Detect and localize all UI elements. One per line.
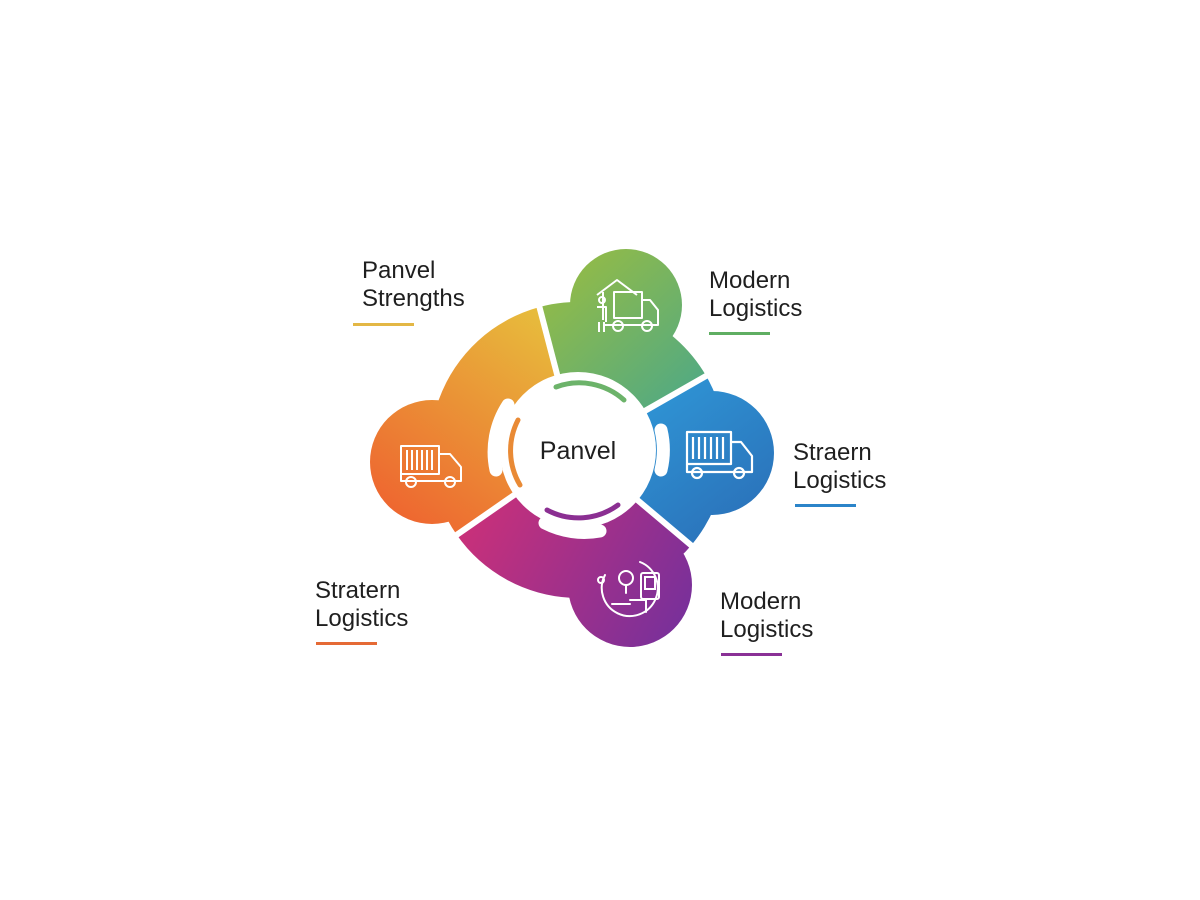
label: Modern Logistics (bottom) [720, 588, 813, 643]
segment: orange [370, 307, 559, 535]
icon: blue truck [687, 432, 752, 478]
label: Modern Logistics (top): Modern [709, 267, 790, 294]
segment: green [540, 249, 706, 412]
label: Panvel Strengths: Panvel [362, 257, 435, 284]
label: Modern Logistics (bottom): Modern [720, 588, 801, 615]
center circle [515, 387, 641, 513]
icon: purple cycle [598, 562, 659, 616]
icon: warehouse truck [597, 280, 658, 332]
inner arcs [511, 383, 624, 518]
label: Stratern Logistics: Stratern [315, 577, 400, 604]
label: Stratern Logistics: Logistics [315, 605, 408, 632]
underline: orange [316, 642, 377, 645]
label: Stratern Logistics [315, 577, 408, 632]
capsule cutouts [494, 405, 663, 532]
label: Modern Logistics (top) [709, 267, 802, 322]
icon: orange truck [401, 446, 461, 487]
label: Panvel Strengths [362, 257, 465, 312]
underline: purple [721, 653, 782, 656]
underline: blue [795, 504, 856, 507]
label: Modern Logistics (top): Logistics [709, 295, 802, 322]
label: Panvel Strengths: Strengths [362, 285, 465, 312]
label: Straern Logistics [793, 439, 886, 494]
label: Straern Logistics: Straern [793, 439, 872, 466]
center circle: Panvel [540, 437, 616, 465]
segment: purple [457, 493, 692, 647]
underline: gold [353, 323, 414, 326]
segment: blue [636, 376, 774, 545]
underline: green [709, 332, 770, 335]
label: Straern Logistics: Logistics [793, 467, 886, 494]
label: Modern Logistics (bottom): Logistics [720, 616, 813, 643]
